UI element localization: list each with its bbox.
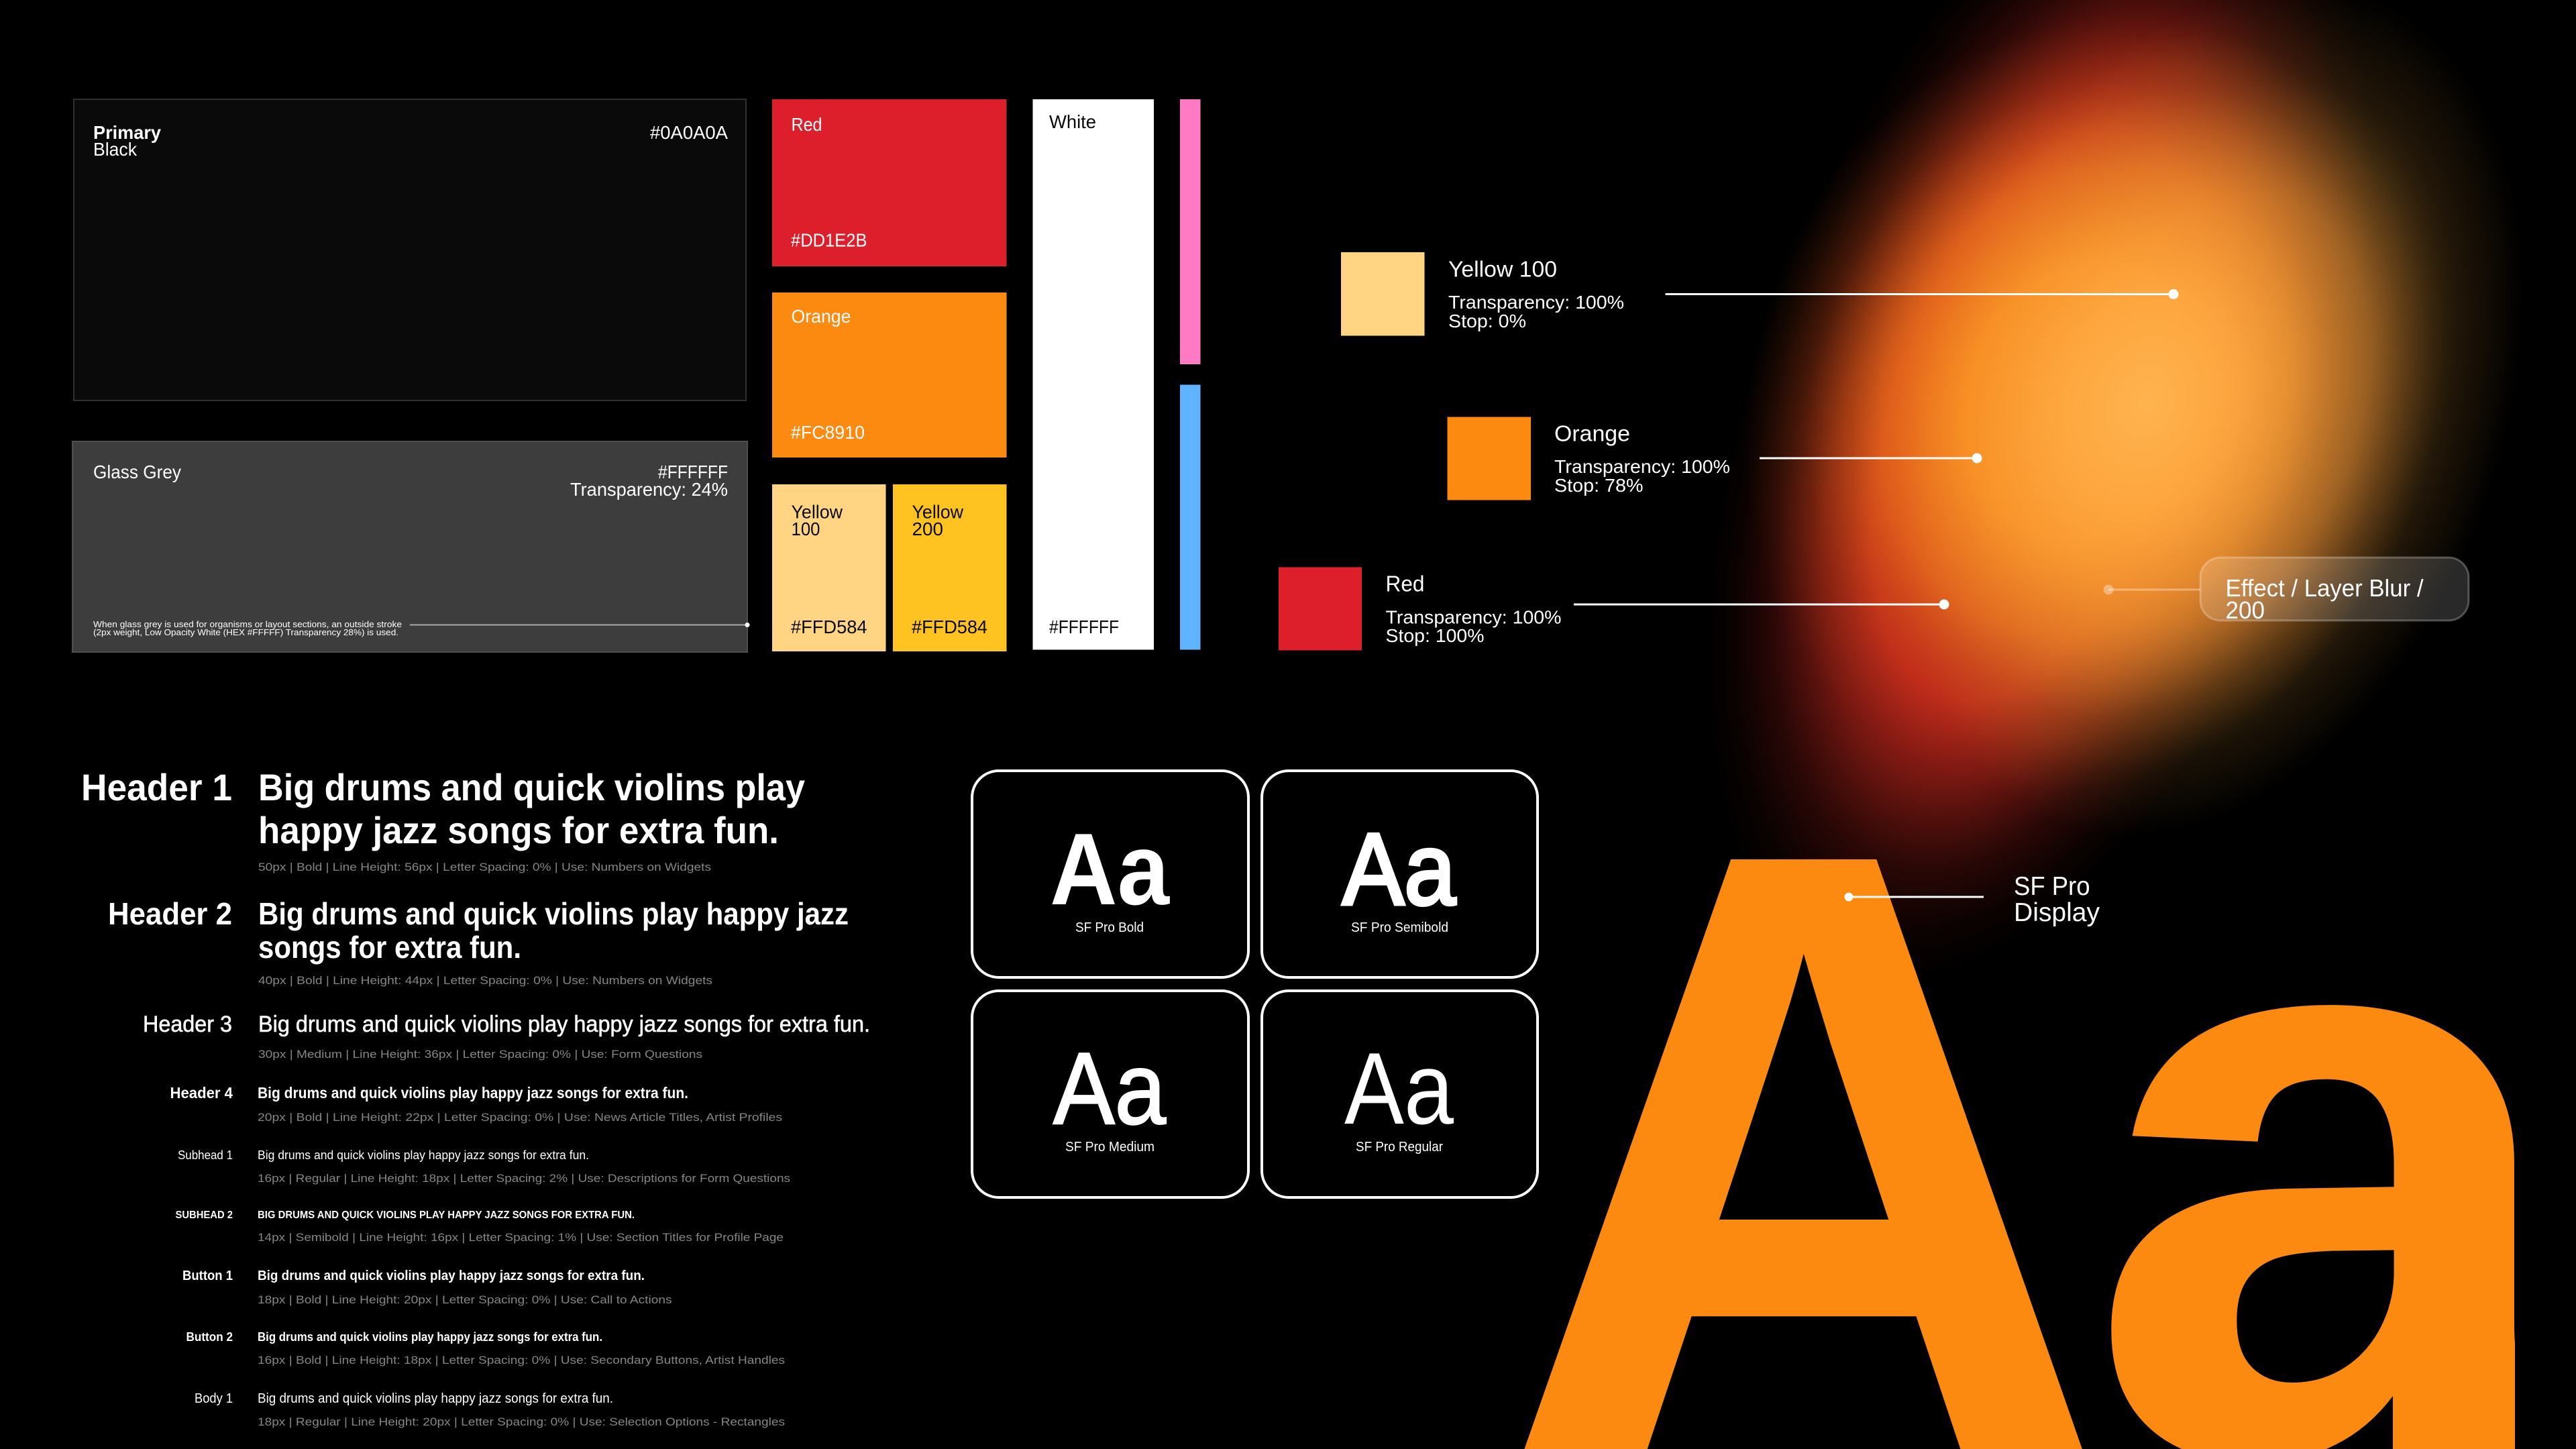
- type row: subhead 2: 14px | Semibold | Line Height: 16px | Letter Spacing: 1% | Use: Section Titles for Profile Page: [258, 1231, 784, 1244]
- swatch: red: #DD1E2B: [791, 229, 867, 251]
- type row: button 2: Big drums and quick violins play happy jazz songs for extra fun.: [258, 1330, 602, 1344]
- type row: subhead 2: [176, 1210, 784, 1244]
- gradient stop: red: Transparency: 100%: [1386, 606, 1562, 628]
- type row: header 4: Big drums and quick violins play happy jazz songs for extra fun.: [258, 1084, 688, 1102]
- callout: layer blur effect: [2104, 557, 2469, 624]
- type row: header 4: Header 4: [170, 1084, 233, 1102]
- gradient stop: orange: Stop: 78%: [1554, 475, 1644, 496]
- type row: button 2: [186, 1330, 785, 1366]
- type row: header 4: [170, 1084, 782, 1124]
- swatch: yellow 200: Yellow: [912, 502, 964, 522]
- type row: header 1: happy jazz songs for extra fun.: [258, 809, 779, 851]
- gradient stop: red: Red: [1386, 572, 1425, 596]
- gradient stop: orange: Transparency: 100%: [1554, 456, 1730, 477]
- gradient stop: yellow 100: [1341, 252, 2179, 335]
- panel: primary black: Primary: [93, 122, 161, 143]
- panel: primary black: #0A0A0A: [650, 122, 728, 143]
- callout: layer blur effect: 200: [2226, 596, 2265, 624]
- font tile: SF Pro Regular: Aa: [1344, 1032, 1454, 1146]
- swatch: blue: [1180, 385, 1201, 649]
- font tile: SF Pro Medium: SF Pro Medium: [1065, 1140, 1155, 1155]
- gradient stop: orange: Orange: [1554, 421, 1630, 445]
- type row: body 1: Big drums and quick violins play happy jazz songs for extra fun.: [258, 1391, 613, 1406]
- swatch: yellow 100: #FFD584: [791, 616, 867, 637]
- type row: body 1: [195, 1391, 785, 1428]
- gradient stop: red: Stop: 100%: [1386, 625, 1484, 646]
- swatch: orange: #FC8910: [791, 422, 865, 443]
- type row: subhead 2: BIG DRUMS AND QUICK VIOLINS PLAY HAPPY JAZZ SONGS FOR EXTRA FUN.: [258, 1210, 635, 1221]
- swatch: white: White: [1049, 111, 1096, 132]
- font tile: SF Pro Semibold: SF Pro Semibold: [1351, 920, 1448, 935]
- panel: glass grey: [72, 441, 750, 652]
- type row: header 2: Header 2: [108, 896, 232, 931]
- type row: header 2: Big drums and quick violins play happy jazz: [258, 896, 849, 931]
- swatch: yellow 100: [772, 484, 885, 651]
- font tile: SF Pro Semibold: Aa: [1342, 812, 1456, 926]
- type row: subhead 1: Big drums and quick violins play happy jazz songs for extra fun.: [258, 1148, 589, 1162]
- swatch: yellow 100: Yellow: [792, 502, 843, 522]
- callout: SF Pro Display: Display: [2014, 898, 2100, 927]
- swatch: pink: [1180, 99, 1201, 364]
- swatch: white: #FFFFFF: [1049, 616, 1119, 637]
- type row: header 2: songs for extra fun.: [258, 930, 521, 965]
- type row: header 3: [143, 1012, 870, 1061]
- type row: button 1: 18px | Bold | Line Height: 20px | Letter Spacing: 0% | Use: Call to Actions: [258, 1293, 672, 1306]
- type row: subhead 1: Subhead 1: [178, 1148, 233, 1162]
- swatch: orange: Orange: [792, 306, 851, 327]
- swatch: yellow 200: [893, 484, 1006, 651]
- font tile: SF Pro Semibold: [1262, 771, 1538, 977]
- type row: header 3: 30px | Medium | Line Height: 36px | Letter Spacing: 0% | Use: Form Questions: [258, 1048, 702, 1061]
- effect: blurred gradient blob: [1574, 0, 2576, 1068]
- gradient stop: yellow 100: Stop: 0%: [1448, 311, 1526, 331]
- font tile: SF Pro Bold: [972, 771, 1248, 977]
- font tile: SF Pro Bold: SF Pro Bold: [1075, 920, 1144, 935]
- panel: primary black: [74, 99, 746, 400]
- swatch: red: Red: [792, 114, 822, 135]
- type row: header 1: 50px | Bold | Line Height: 56px | Letter Spacing: 0% | Use: Numbers on Widgets: [258, 861, 711, 873]
- panel: glass grey: (2px weight, Low Opacity White (HEX #FFFFF) Transparency 28%) is used.: [93, 627, 398, 637]
- panel: glass grey: Transparency: 24%: [570, 479, 728, 500]
- type row: body 1: 18px | Regular | Line Height: 20px | Letter Spacing: 0% | Use: Selection Options - Rectangles: [258, 1415, 785, 1428]
- type row: body 1: Body 1: [195, 1391, 233, 1406]
- type row: button 1: Big drums and quick violins play happy jazz songs for extra fun.: [258, 1269, 645, 1283]
- type row: header 2: 40px | Bold | Line Height: 44px | Letter Spacing: 0% | Use: Numbers on Widgets: [258, 974, 712, 987]
- type row: header 4: 20px | Bold | Line Height: 22px | Letter Spacing: 0% | Use: News Article Titles, Artist Profiles: [258, 1111, 782, 1124]
- font tile: SF Pro Regular: [1262, 991, 1538, 1197]
- swatch: yellow 200: 200: [912, 519, 943, 539]
- type row: header 1: [81, 766, 805, 873]
- type row: button 1: Button 1: [182, 1269, 233, 1283]
- type row: subhead 1: [178, 1148, 790, 1185]
- swatch: red: [772, 99, 1006, 266]
- panel: glass grey: #FFFFFF: [658, 462, 728, 482]
- type row: subhead 1: 16px | Regular | Line Height: 18px | Letter Spacing: 2% | Use: Descriptions for Form Questions: [258, 1172, 790, 1185]
- panel: glass grey: When glass grey is used for organisms or layout sections, an outside stroke: [93, 619, 402, 629]
- font tile: SF Pro Medium: [972, 991, 1248, 1197]
- type row: subhead 2: SUBHEAD 2: [176, 1210, 233, 1221]
- swatch: yellow 200: #FFD584: [912, 616, 987, 637]
- type row: header 3: Header 3: [143, 1012, 232, 1037]
- gradient stop: yellow 100: Transparency: 100%: [1448, 292, 1624, 313]
- swatch: orange: [772, 292, 1006, 458]
- swatch: yellow 100: 100: [792, 519, 820, 539]
- type row: header 1: Big drums and quick violins play: [258, 766, 805, 808]
- type row: button 2: Button 2: [186, 1330, 233, 1344]
- type row: button 2: 16px | Bold | Line Height: 18px | Letter Spacing: 0% | Use: Secondary Buttons, Artist Handles: [258, 1354, 785, 1366]
- type row: button 1: [182, 1269, 672, 1306]
- font tile: SF Pro Bold: Aa: [1050, 812, 1170, 926]
- type row: header 3: Big drums and quick violins play happy jazz songs for extra fun.: [258, 1012, 870, 1037]
- gradient stop: orange: [1448, 417, 1982, 500]
- gradient stop: yellow 100: Yellow 100: [1448, 256, 1557, 282]
- display specimen: big Aa: [1495, 666, 2576, 1449]
- font tile: SF Pro Regular: SF Pro Regular: [1356, 1140, 1443, 1155]
- panel: glass grey: Glass Grey: [93, 462, 181, 482]
- type row: header 2: [108, 896, 849, 987]
- panel: primary black: Black: [93, 139, 138, 160]
- swatch: white: [1033, 99, 1154, 649]
- type row: header 1: Header 1: [81, 766, 232, 808]
- callout: SF Pro Display: SF Pro: [2014, 872, 2090, 901]
- font tile: SF Pro Medium: Aa: [1053, 1032, 1166, 1146]
- gradient stop: red: [1279, 568, 1949, 651]
- callout: layer blur effect: Effect / Layer Blur /: [2226, 574, 2423, 602]
- callout: SF Pro Display: [1845, 872, 2100, 927]
